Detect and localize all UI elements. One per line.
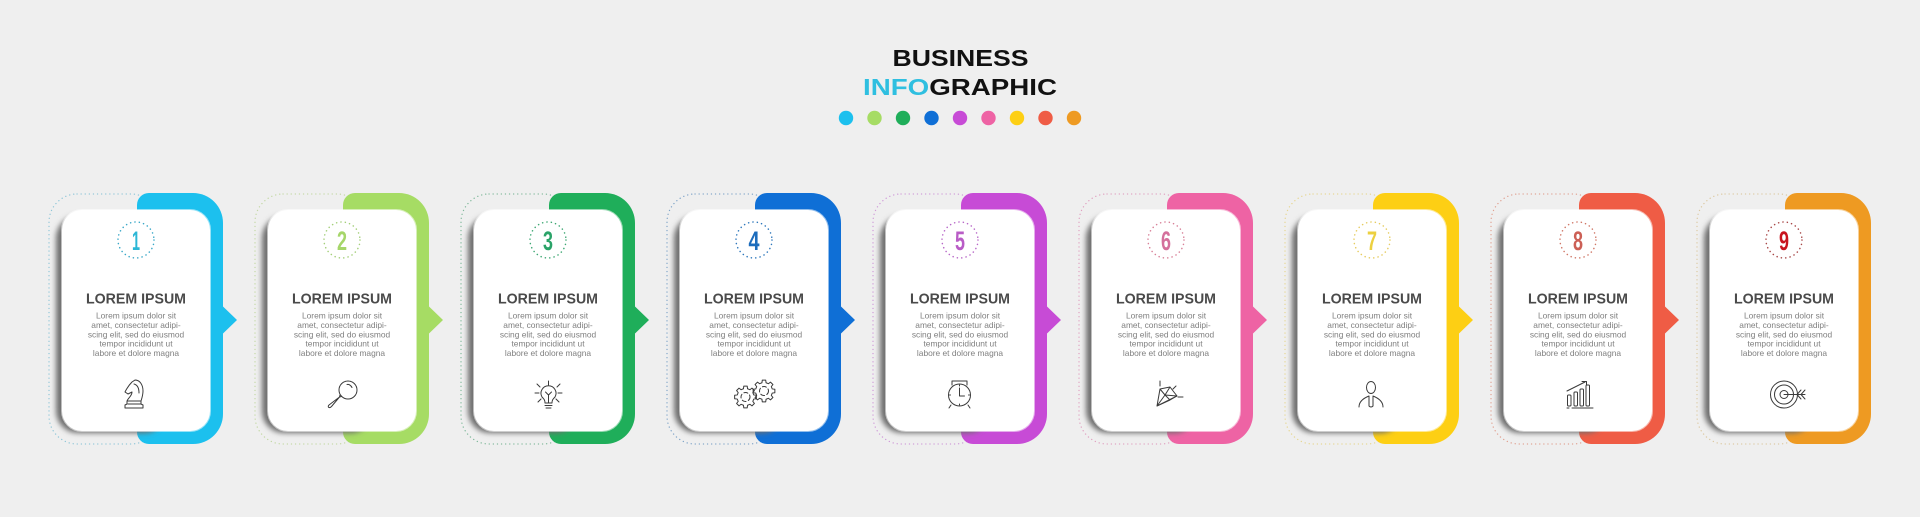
number 6: 6 bbox=[1161, 226, 1171, 256]
body text: Lorem ipsum dolor sit bbox=[508, 310, 589, 320]
body text: labore et dolore magna bbox=[505, 348, 591, 358]
body text: scing elit, sed do eiusmod bbox=[912, 330, 1009, 340]
number 9: 9 bbox=[1779, 226, 1789, 256]
number 7: 7 bbox=[1367, 226, 1377, 256]
body text: amet, consectetur adipi- bbox=[1121, 320, 1211, 330]
body text: scing elit, sed do eiusmod bbox=[706, 330, 803, 340]
body text: tempor incididunt ut bbox=[1747, 338, 1821, 348]
heading: LOREM IPSUM bbox=[1116, 290, 1216, 308]
body text: amet, consectetur adipi- bbox=[91, 320, 181, 330]
body text: scing elit, sed do eiusmod bbox=[1530, 330, 1627, 340]
number 5: 5 bbox=[955, 226, 965, 256]
body text: tempor incididunt ut bbox=[99, 338, 173, 348]
panel: step 3 bbox=[461, 193, 649, 444]
body text: labore et dolore magna bbox=[1535, 348, 1621, 358]
body text: scing elit, sed do eiusmod bbox=[1118, 330, 1215, 340]
body text bbox=[912, 310, 1009, 358]
number 3: 3 bbox=[543, 226, 553, 256]
body text: Lorem ipsum dolor sit bbox=[1126, 310, 1207, 320]
body text: labore et dolore magna bbox=[299, 348, 385, 358]
panel: step 1 bbox=[49, 193, 237, 444]
body text bbox=[1118, 310, 1215, 358]
number 8: 8 bbox=[1573, 226, 1583, 256]
body text: Lorem ipsum dolor sit bbox=[714, 310, 795, 320]
icon: light bulb bbox=[535, 381, 562, 408]
icon: alarm clock bbox=[948, 381, 970, 408]
title bbox=[863, 45, 1057, 100]
body text: labore et dolore magna bbox=[1123, 348, 1209, 358]
body text: labore et dolore magna bbox=[917, 348, 1003, 358]
body text: labore et dolore magna bbox=[1741, 348, 1827, 358]
heading: LOREM IPSUM bbox=[86, 290, 186, 308]
body text bbox=[88, 310, 185, 358]
body text: amet, consectetur adipi- bbox=[709, 320, 799, 330]
body text: Lorem ipsum dolor sit bbox=[1538, 310, 1619, 320]
body text: labore et dolore magna bbox=[1329, 348, 1415, 358]
heading: LOREM IPSUM bbox=[704, 290, 804, 308]
icon: magnifier bbox=[328, 381, 357, 408]
body text: amet, consectetur adipi- bbox=[1327, 320, 1417, 330]
body text: amet, consectetur adipi- bbox=[503, 320, 593, 330]
heading: LOREM IPSUM bbox=[910, 290, 1010, 308]
body text: scing elit, sed do eiusmod bbox=[1736, 330, 1833, 340]
body text: tempor incididunt ut bbox=[305, 338, 379, 348]
number 4: 4 bbox=[748, 226, 760, 256]
body text bbox=[294, 310, 391, 358]
body text: amet, consectetur adipi- bbox=[915, 320, 1005, 330]
body text: tempor incididunt ut bbox=[1541, 338, 1615, 348]
icon: person bbox=[1359, 382, 1383, 407]
body text bbox=[1530, 310, 1627, 358]
icon: gears bbox=[735, 380, 775, 408]
heading: LOREM IPSUM bbox=[498, 290, 598, 308]
title: BUSINESS bbox=[892, 45, 1028, 71]
body text: scing elit, sed do eiusmod bbox=[88, 330, 185, 340]
title: INFO GRAPHIC bbox=[863, 74, 1057, 100]
body text: tempor incididunt ut bbox=[511, 338, 585, 348]
body text: Lorem ipsum dolor sit bbox=[920, 310, 1001, 320]
panel: step 8 bbox=[1491, 193, 1679, 444]
icon: diamond bbox=[1157, 381, 1183, 406]
body text: tempor incididunt ut bbox=[1335, 338, 1409, 348]
body text: scing elit, sed do eiusmod bbox=[500, 330, 597, 340]
body text: amet, consectetur adipi- bbox=[1533, 320, 1623, 330]
panel: step 7 bbox=[1285, 193, 1473, 444]
heading: LOREM IPSUM bbox=[292, 290, 392, 308]
body text: Lorem ipsum dolor sit bbox=[96, 310, 177, 320]
heading: LOREM IPSUM bbox=[1322, 290, 1422, 308]
panel: step 6 bbox=[1079, 193, 1267, 444]
body text bbox=[1736, 310, 1833, 358]
panel: step 5 bbox=[873, 193, 1061, 444]
body text: scing elit, sed do eiusmod bbox=[1324, 330, 1421, 340]
panel: step 2 bbox=[255, 193, 443, 444]
body text: tempor incididunt ut bbox=[1129, 338, 1203, 348]
panel: step 9 bbox=[1697, 193, 1871, 444]
body text: tempor incididunt ut bbox=[717, 338, 791, 348]
body text: Lorem ipsum dolor sit bbox=[1332, 310, 1413, 320]
icon: chess knight bbox=[125, 380, 143, 408]
heading: LOREM IPSUM bbox=[1734, 290, 1834, 308]
icon: bar chart bbox=[1567, 382, 1593, 408]
body text: scing elit, sed do eiusmod bbox=[294, 330, 391, 340]
heading: LOREM IPSUM bbox=[1528, 290, 1628, 308]
body text bbox=[706, 310, 803, 358]
number 1: 1 bbox=[132, 226, 140, 256]
body text: labore et dolore magna bbox=[93, 348, 179, 358]
body text: tempor incididunt ut bbox=[923, 338, 997, 348]
panel: step 4 bbox=[667, 193, 855, 444]
body text: Lorem ipsum dolor sit bbox=[302, 310, 383, 320]
body text bbox=[1324, 310, 1421, 358]
body text: amet, consectetur adipi- bbox=[1739, 320, 1829, 330]
body text: amet, consectetur adipi- bbox=[297, 320, 387, 330]
number 2: 2 bbox=[337, 226, 347, 256]
body text: Lorem ipsum dolor sit bbox=[1744, 310, 1825, 320]
icon: target with arrow bbox=[1770, 381, 1805, 408]
body text: labore et dolore magna bbox=[711, 348, 797, 358]
body text bbox=[500, 310, 597, 358]
color dots row bbox=[839, 111, 1081, 125]
